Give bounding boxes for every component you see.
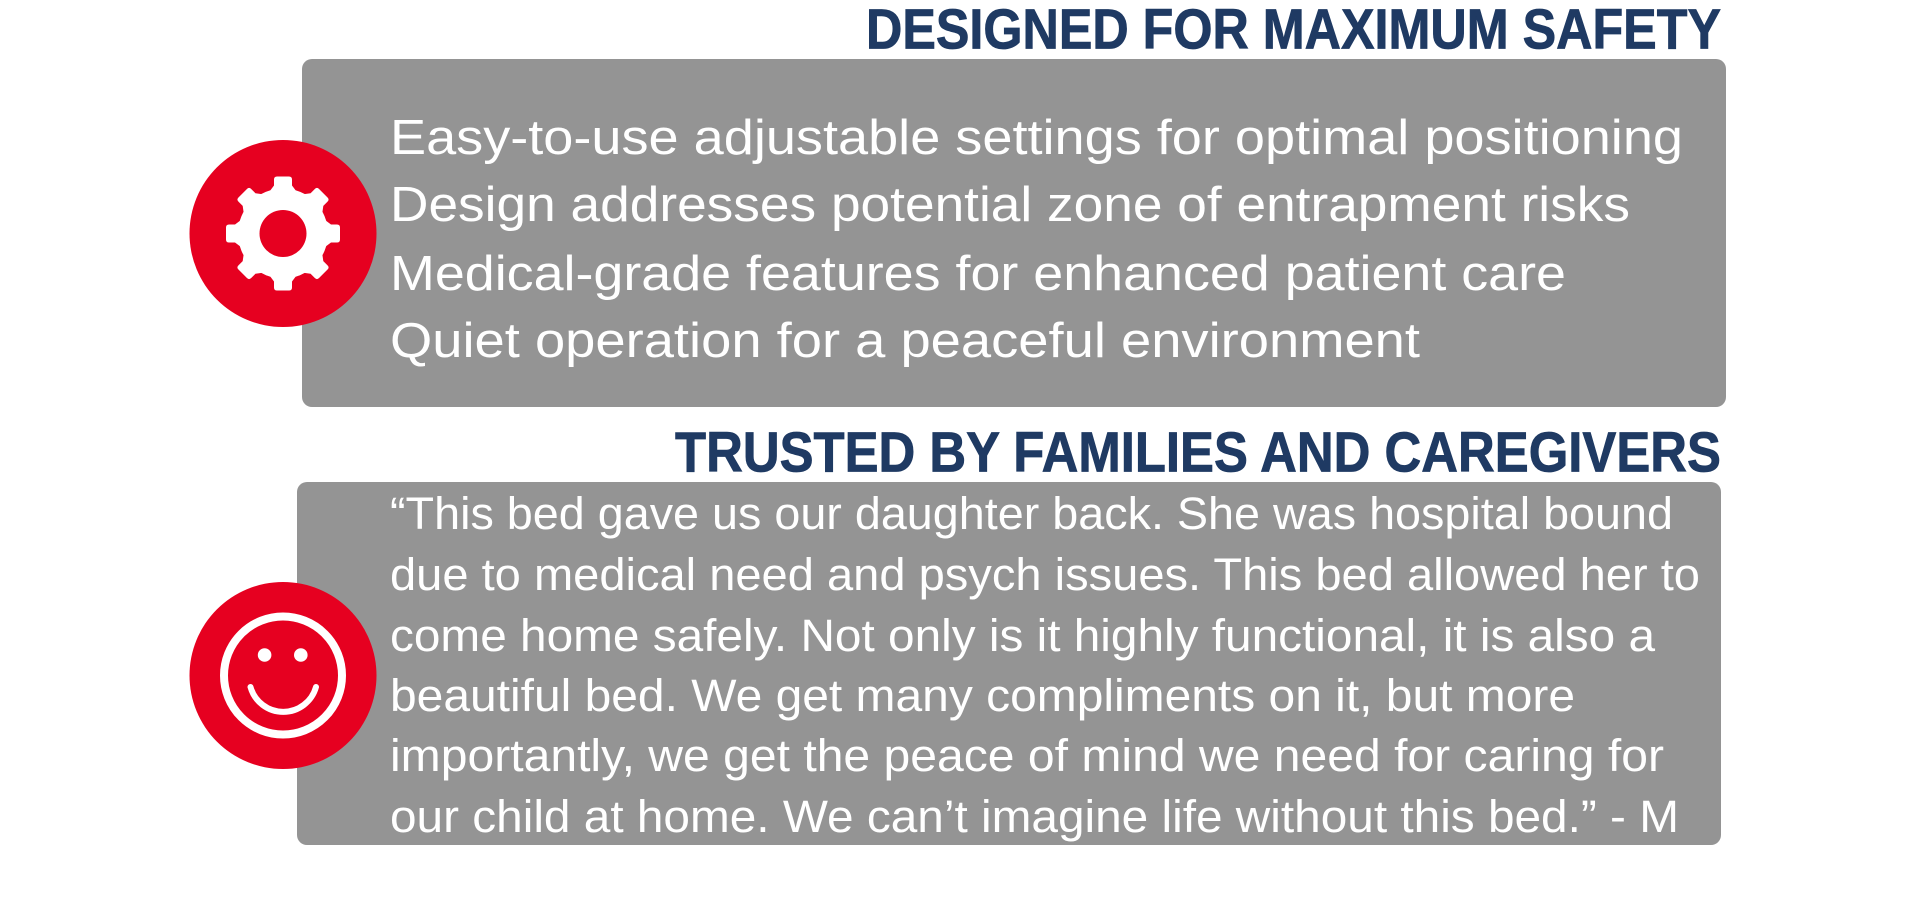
feature list: Medical-grade features for enhanced patient care <box>390 247 1566 301</box>
heading: trusted by families and caregivers: TRUSTED BY FAMILIES AND CAREGIVERS <box>675 420 1721 484</box>
testimonial quote: importantly, we get the peace of mind we need for caring for <box>390 730 1664 781</box>
feature list: Design addresses potential zone of entrapment risks <box>390 178 1630 232</box>
panel background <box>297 482 1721 845</box>
testimonial quote: beautiful bed. We get many compliments on it, but more <box>390 670 1575 721</box>
feature list: Quiet operation for a peaceful environment <box>390 314 1420 368</box>
feature list <box>390 111 1683 368</box>
icon: smiley in red circle <box>190 582 376 769</box>
icon: gear in red circle <box>190 140 376 327</box>
panel: testimonial <box>190 482 1721 845</box>
feature list: Easy-to-use adjustable settings for optimal positioning <box>390 111 1683 165</box>
testimonial quote: “This bed gave us our daughter back. She was hospital bound <box>390 488 1673 539</box>
testimonial quote <box>390 488 1700 842</box>
testimonial quote: due to medical need and psych issues. This bed allowed her to <box>390 549 1700 600</box>
panel: safety features <box>190 59 1726 407</box>
testimonial quote: our child at home. We can’t imagine life without this bed.” - M <box>390 791 1679 842</box>
testimonial quote: come home safely. Not only is it highly functional, it is also a <box>390 610 1656 661</box>
panel background <box>302 59 1726 407</box>
